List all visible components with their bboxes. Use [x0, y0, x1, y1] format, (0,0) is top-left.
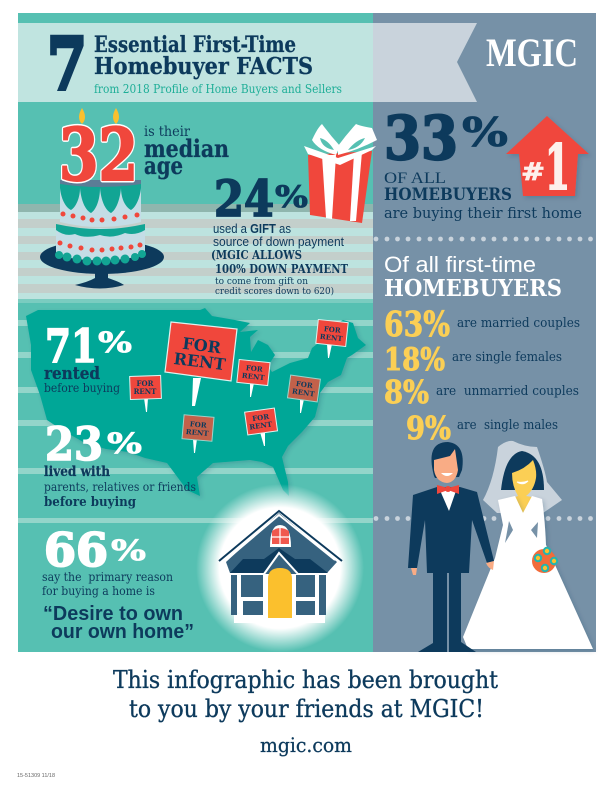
stat: 33 percent of all homebuyers: HOMEBUYERS: [384, 185, 512, 205]
bow tie: [437, 485, 459, 494]
stat: 23 percent lived with family: before buying: [44, 495, 136, 510]
map: United States: [26, 308, 366, 496]
title: [47, 21, 342, 106]
striped band behind cake and gift: [18, 204, 373, 299]
stat: 71 percent rented: 71: [45, 319, 97, 373]
veil: [483, 441, 562, 513]
stat: 8 percent: are unmarried couples: [436, 384, 579, 399]
top tier: [60, 180, 141, 227]
median age text: age: [144, 151, 183, 180]
stat: 63 percent: are married couples: [457, 316, 580, 331]
icon: gift box: [304, 124, 377, 223]
sign: small for rent, south: [245, 408, 278, 446]
stat: 18 percent: are single females: [452, 350, 562, 365]
stat: 71 percent rented: rented: [44, 364, 100, 384]
stat: 33 percent of all homebuyers: [384, 104, 582, 222]
sign: small for rent, west: RENT: [134, 387, 157, 396]
stat: 8 percent: 8%: [384, 373, 429, 411]
stat: 66 percent primary reason: our own home”: [51, 621, 194, 643]
trousers: [418, 573, 476, 652]
red beads: [58, 212, 142, 252]
stat: 24 percent: source of down payment: [213, 235, 344, 249]
hands: [411, 561, 494, 575]
hair: [501, 451, 544, 490]
panel: left teal background: [18, 13, 374, 652]
sign: small for rent, northeast: FOR: [323, 324, 341, 335]
footer message: to you by your friends at MGIC!: [129, 695, 484, 723]
stat: 63 percent: [384, 304, 580, 345]
sign: large for rent: RENT: [173, 349, 227, 374]
stat: 24 percent: to come from gift on: [215, 276, 308, 287]
footer message: [113, 666, 498, 723]
stat: 24 percent: 100% DOWN PAYMENT: [215, 262, 348, 276]
buyer type list: [384, 304, 580, 447]
sign: small for rent, northeast: [316, 319, 348, 358]
document code: 15-51309 11/18: [17, 773, 55, 779]
stat: 24 percent: (MGIC ALLOWS: [211, 248, 302, 262]
icon: birthday cake: [40, 108, 164, 288]
footer message: This infographic has been brought: [113, 666, 498, 694]
stat: 18 percent: [384, 342, 562, 378]
sign: small for rent, midwest: [237, 359, 270, 397]
sign: small for rent, midwest: FOR: [245, 363, 263, 374]
icon: number one house arrow: #: [521, 157, 545, 186]
stat: 18 percent: 18%: [384, 342, 445, 378]
sign: small for rent, northeast: RENT: [319, 332, 344, 343]
sign: small for rent, west: FOR: [137, 379, 154, 388]
heading: of all first-time homebuyers: [384, 252, 562, 302]
teal beads: [55, 250, 146, 266]
stat: 66 percent primary reason: “Desire to own: [43, 603, 183, 625]
stat: 66 percent primary reason: for buying a home is: [42, 584, 155, 598]
sign: small for rent, central: FOR: [189, 419, 207, 430]
stat: 24 percent: [211, 169, 348, 297]
face and neck: [512, 460, 536, 513]
median age text: is their: [144, 124, 190, 140]
roof: [226, 513, 337, 573]
sign: small for rent, east: [287, 375, 320, 413]
sign: small for rent, east: RENT: [291, 386, 316, 399]
stat: 24 percent: 24: [214, 169, 274, 228]
lower dotted divider: [374, 516, 593, 521]
glow behind house: [196, 484, 364, 652]
big seven: 7: [47, 21, 87, 106]
logo: MGIC: MGIC: [486, 30, 578, 75]
sign: small for rent, central: [182, 415, 214, 453]
sign: small for rent, central: RENT: [185, 427, 210, 438]
cake plate: [40, 240, 164, 274]
candle flames: [79, 108, 85, 124]
stat: 23 percent lived with family: parents, relatives or friends: [44, 480, 196, 494]
stat: 33 percent of all homebuyers: 33: [384, 104, 458, 174]
icon: birthday cake: 32: [59, 112, 138, 197]
lower tier: [56, 228, 145, 260]
stat: 23 percent lived with family: %: [107, 427, 142, 460]
dress: [463, 496, 593, 649]
lower left panel with stripes: [18, 299, 373, 652]
median age text: median: [144, 134, 229, 163]
website: mgic.com: [260, 733, 352, 757]
sign: small for rent, east: FOR: [295, 379, 314, 390]
sign: large for rent: [165, 322, 237, 406]
icon: house: [219, 511, 342, 623]
bouquet: [532, 548, 557, 573]
stat: 9 percent: [406, 409, 558, 447]
header ribbon: [18, 23, 477, 102]
stat: 23 percent lived with family: [44, 417, 196, 510]
stat: 23 percent lived with family: 23: [45, 417, 103, 471]
stat: 71 percent rented: [44, 319, 132, 395]
stat: 9 percent: 9%: [406, 409, 451, 447]
stat: 8 percent: [384, 373, 579, 411]
roof window: [270, 525, 291, 547]
icon: number one house arrow: [506, 116, 589, 204]
dotted divider: [374, 237, 593, 241]
stat: 9 percent: are single males: [457, 418, 558, 433]
sign: small for rent, south: FOR: [252, 412, 270, 423]
stat: 24 percent: used a GIFT as: [213, 222, 291, 236]
hair: [431, 442, 463, 478]
sign: large for rent: FOR: [181, 334, 223, 357]
stat: 66 percent primary reason: 66: [44, 523, 108, 577]
stat: 24 percent: credit scores down to 620): [215, 286, 334, 297]
stat: 71 percent rented: before buying: [44, 381, 120, 395]
illustration: bride: [463, 441, 593, 649]
title line one: Essential First-Time: [94, 32, 296, 58]
sign: small for rent, midwest: RENT: [241, 371, 266, 382]
stat: 33 percent of all homebuyers: OF ALL: [384, 170, 446, 187]
icon: number one house arrow: 1: [545, 131, 570, 204]
median age text: [144, 124, 229, 180]
stat: 71 percent rented: %: [98, 326, 132, 359]
door: [268, 568, 292, 618]
face: [434, 449, 458, 483]
stat: 66 percent primary reason: [42, 523, 194, 643]
sign: small for rent, west: [130, 375, 161, 412]
house body: [231, 575, 237, 615]
heading: of all first-time homebuyers: HOMEBUYERS: [384, 275, 562, 302]
jacket: [408, 487, 494, 573]
sign: small for rent, south: RENT: [249, 419, 273, 432]
candle number 32: 32: [59, 112, 138, 197]
shirt: [439, 488, 457, 511]
stat: 66 percent primary reason: %: [111, 534, 146, 567]
illustration: groom: [408, 442, 494, 652]
subtitle: from 2018 Profile of Home Buyers and Sellers: [94, 82, 342, 96]
stat: 23 percent lived with family: lived with: [44, 464, 110, 480]
stat: 33 percent of all homebuyers: %: [462, 110, 508, 156]
stat: 33 percent of all homebuyers: are buying their first home: [384, 204, 582, 222]
panel: right slate background: [373, 13, 596, 652]
stat: 63 percent: 63%: [384, 304, 450, 345]
stat: 66 percent primary reason: say the primary reason: [42, 570, 173, 584]
heading: of all first-time homebuyers: Of all first-time: [384, 252, 536, 277]
title line two: Homebuyer FACTS: [94, 53, 313, 80]
stat: 24 percent: %: [275, 180, 308, 215]
